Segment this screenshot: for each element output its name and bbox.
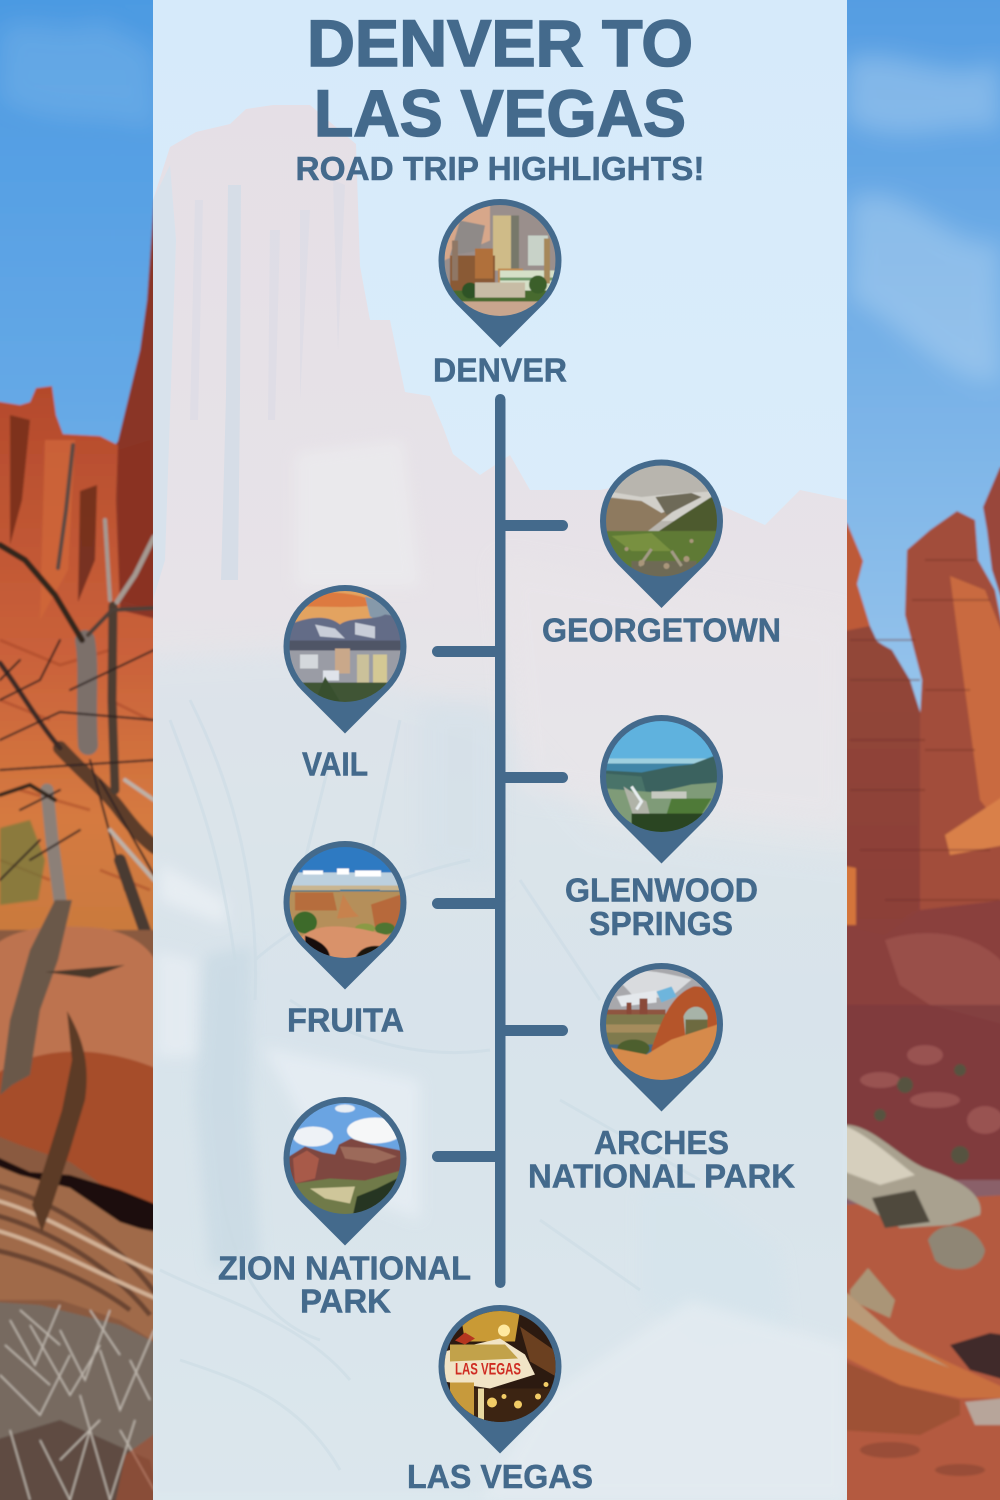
- title: LAS VEGAS: [314, 76, 686, 150]
- background photo: right rock scene: [840, 0, 1000, 1500]
- label: Glenwood Springs: SPRINGS: [589, 905, 733, 942]
- stop: Denver: [433, 199, 567, 388]
- stop: Georgetown: [542, 460, 781, 648]
- label: Zion National Park: ZION NATIONAL: [218, 1250, 471, 1286]
- label: Georgetown: GEORGETOWN: [542, 612, 781, 648]
- title: DENVER TO: [307, 6, 693, 80]
- label: Zion National Park: [218, 1250, 471, 1320]
- label: Fruita: FRUITA: [287, 1002, 404, 1038]
- stop: Glenwood Springs: [565, 715, 758, 942]
- stop: Las Vegas: [407, 1305, 593, 1495]
- stop: Arches National Park: [528, 963, 795, 1194]
- tree branches: [0, 445, 156, 945]
- boulder and wood: [0, 928, 153, 1344]
- background photo: left rock scene: [0, 0, 165, 1500]
- subtitle: ROAD TRIP HIGHLIGHTS!: [296, 150, 704, 187]
- label: Glenwood Springs: GLENWOOD: [565, 872, 758, 908]
- stop: Fruita: [284, 841, 406, 1038]
- translucent centre panel: [130, 0, 870, 1500]
- label: Denver: DENVER: [433, 352, 567, 388]
- timeline spine with branches: [432, 394, 568, 1288]
- label: Zion National Park: PARK: [300, 1282, 391, 1320]
- stop: Vail: [284, 585, 406, 782]
- label: Glenwood Springs: [565, 872, 758, 942]
- label: Arches National Park: ARCHES: [594, 1124, 729, 1161]
- label: Vail: VAIL: [302, 746, 368, 782]
- label: Las Vegas: LAS VEGAS: [407, 1458, 593, 1495]
- stop: Zion National Park: [218, 1097, 471, 1320]
- label: Arches National Park: NATIONAL PARK: [528, 1158, 795, 1194]
- label: Arches National Park: [528, 1124, 795, 1194]
- stop: Las Vegas: LAS VEGAS: [455, 1360, 521, 1378]
- title: [296, 6, 704, 187]
